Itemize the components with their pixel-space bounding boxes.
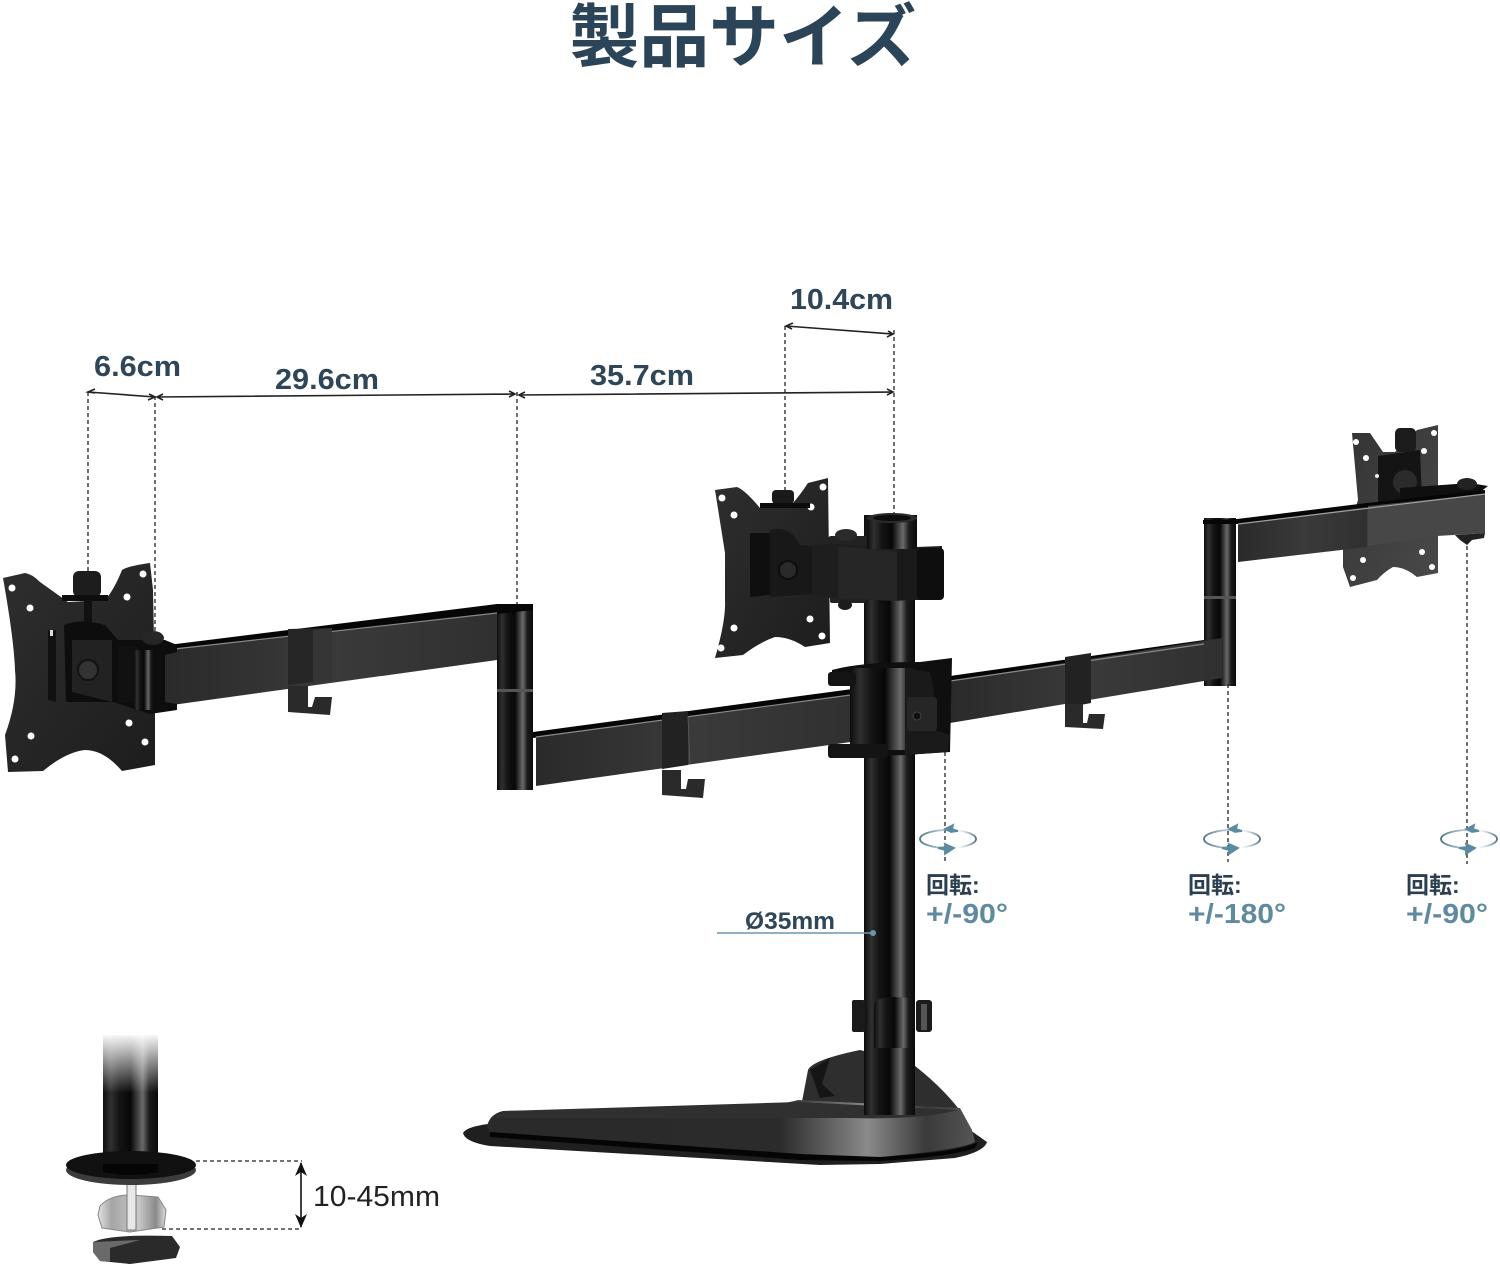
rotation icon: middle bbox=[1204, 825, 1260, 854]
sleeve bbox=[288, 628, 332, 685]
rotation label: right: 回転: bbox=[1406, 872, 1460, 898]
title: 製品サイズ bbox=[570, 0, 916, 76]
base bbox=[463, 1050, 987, 1165]
clamp thickness dimension: 10-45mm bbox=[313, 1181, 440, 1213]
rotation icon: right bbox=[1441, 825, 1497, 854]
right upper arm bbox=[1203, 490, 1485, 562]
hook bbox=[662, 770, 705, 798]
rotation label: middle bbox=[1188, 872, 1286, 929]
right lower arm bbox=[950, 518, 1236, 729]
label: 35.7cm: 35.7cm bbox=[590, 360, 694, 392]
right mount plate bbox=[1343, 425, 1488, 587]
left arm bbox=[160, 604, 533, 790]
clamp thickness dimension bbox=[162, 1161, 440, 1229]
rotation label: left bbox=[926, 872, 1008, 929]
cable clip bbox=[852, 997, 932, 1048]
dimension arrow: 35.7cm bbox=[519, 389, 893, 398]
middle lower arm bbox=[533, 688, 860, 798]
rotation label: right: +/-90° bbox=[1406, 898, 1488, 929]
left mount plate bbox=[3, 563, 177, 772]
column lower hub bbox=[828, 658, 952, 758]
dimension arrow: 10.4cm bbox=[786, 323, 893, 337]
rotation label: left: +/-90° bbox=[926, 898, 1008, 929]
sleeve bbox=[1065, 653, 1091, 708]
tilt bracket bbox=[48, 630, 56, 702]
column diameter callout: Ø35mm bbox=[745, 908, 835, 935]
dimension arrow: 29.6cm bbox=[157, 391, 515, 400]
central column bbox=[852, 515, 932, 1115]
rotation label: right bbox=[1406, 872, 1488, 929]
rotation axis guides bbox=[945, 546, 1467, 864]
dimension guides bbox=[88, 284, 894, 632]
rotation label: middle: +/-180° bbox=[1188, 898, 1286, 929]
rotation label: left: 回転: bbox=[926, 872, 980, 898]
label: 29.6cm: 29.6cm bbox=[275, 364, 379, 396]
sleeve bbox=[662, 711, 688, 769]
hook bbox=[288, 686, 332, 715]
column diameter callout bbox=[717, 908, 876, 936]
rotation label: middle: 回転: bbox=[1188, 872, 1242, 898]
dimension arrow: 6.6cm bbox=[88, 389, 155, 400]
middle mount plate bbox=[715, 478, 868, 658]
label: 10.4cm: 10.4cm bbox=[790, 284, 893, 316]
label: 6.6cm: 6.6cm bbox=[94, 351, 181, 383]
hook bbox=[1065, 704, 1105, 729]
clamp inset bbox=[66, 1033, 196, 1264]
rotation icon: left bbox=[920, 825, 976, 854]
column top bracket bbox=[812, 513, 944, 601]
